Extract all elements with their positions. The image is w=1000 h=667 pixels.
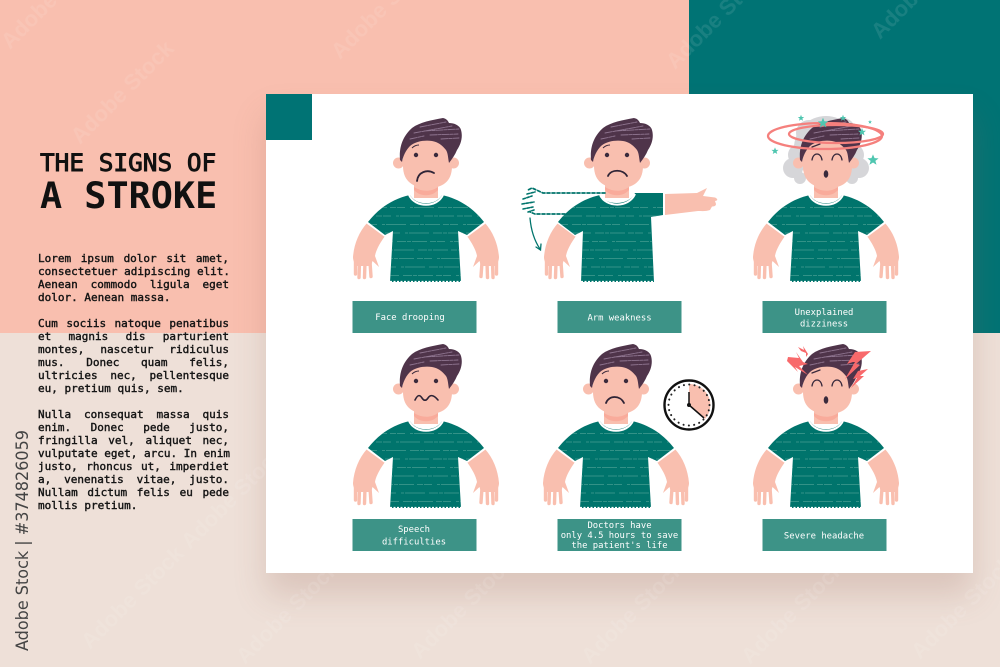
text block: paragraph 3: Nullam dictum felis eu pede (38, 486, 229, 499)
figure: arm weakness (521, 118, 718, 282)
text block: paragraph 2: ultricies nec, pellentesque (38, 369, 229, 382)
label: unexplained dizziness: dizziness (800, 320, 848, 330)
label: speech difficulties (352, 519, 476, 551)
text block: paragraph 2: mus. Donec quam felis, (38, 356, 229, 369)
dizzy rings (768, 123, 883, 149)
watermark pattern: Adobe Stock (176, 440, 289, 554)
label: arm weakness (558, 301, 682, 333)
watermark pattern: Adobe Stock (736, 555, 849, 667)
stock id vertical text: Adobe Stock | #374826059 (13, 430, 33, 651)
text block: paragraph 2: et magnis dis parturient (38, 330, 229, 343)
figure: severe headache (753, 344, 1000, 508)
text block: paragraph 2: Cum sociis natoque penatibus (38, 317, 229, 330)
left arm (544, 222, 576, 278)
white card (266, 94, 973, 573)
watermark pattern: Adobe Stock (231, 555, 344, 667)
title (40, 148, 217, 217)
text block: paragraph 3: mollis pretium. (38, 499, 137, 512)
label: arm weakness: Arm weakness (587, 314, 652, 324)
text block: paragraph 3: Nulla consequat massa quis (38, 408, 229, 421)
figure: speech difficulties (353, 344, 670, 508)
text block: paragraph 3 (38, 408, 230, 512)
watermark pattern: Adobe Stock (76, 540, 189, 654)
figure: doctors time limit (543, 344, 860, 508)
label: doctors time: only 4.5 hours to save (561, 531, 678, 541)
arrow: dashed ghost arm falling (522, 188, 605, 250)
watermark pattern: Adobe Stock (66, 35, 179, 149)
label: doctors time (558, 519, 682, 551)
text block: paragraph 3: justo, rhoncus ut, imperdiet (38, 460, 229, 473)
label: severe headache (762, 519, 886, 551)
label: face drooping (352, 301, 476, 333)
stars (771, 115, 879, 165)
text block: paragraph 3: fringilla vel, aliquet nec, (38, 434, 229, 447)
label: severe headache: Severe headache (784, 532, 864, 542)
title: A STROKE (40, 174, 217, 217)
icon: clock (664, 380, 714, 430)
card corner square (266, 94, 312, 140)
lightning bolts (787, 346, 871, 388)
background: pink block (0, 0, 689, 333)
label: doctors time: the patient's life (571, 541, 668, 551)
shirt with raised sleeve (558, 193, 663, 282)
label: unexplained dizziness (762, 301, 886, 333)
text block: paragraph 3: a, venenatis vitae, justo. (38, 473, 229, 486)
label: doctors time: Doctors have (587, 521, 652, 531)
text block: paragraph 1: consectetuer adipiscing elit. (38, 265, 230, 278)
text block: paragraph 3: enim. Donec pede justo, (38, 421, 229, 434)
figure: face drooping (353, 118, 670, 282)
watermark pattern: Adobe Stock (576, 555, 689, 667)
title: THE SIGNS OF (40, 148, 216, 177)
raised arm (665, 188, 717, 215)
text block: paragraph 1: dolor. Aenean massa. (38, 291, 170, 304)
background: teal block (689, 0, 1000, 333)
text block: paragraph 1 (38, 252, 230, 304)
grey cloud (783, 116, 869, 184)
text block: paragraph 3: vulputate eget, arcu. In enim (38, 447, 230, 460)
text block: paragraph 2 (38, 317, 229, 395)
text block: paragraph 2: montes, nascetur ridiculus (38, 343, 229, 356)
label: face drooping: Face drooping (375, 313, 445, 323)
label: speech difficulties: difficulties (382, 538, 446, 548)
text block: paragraph 1: Lorem ipsum dolor sit amet, (38, 252, 229, 265)
text block: paragraph 2: eu, pretium quis, sem. (38, 382, 184, 395)
watermark pattern: Adobe Stock (406, 550, 519, 664)
label: speech difficulties: Speech (398, 525, 430, 535)
text block: paragraph 1: Aenean commodo ligula eget (38, 278, 229, 291)
label: unexplained dizziness: Unexplained (795, 308, 853, 318)
figure: unexplained dizziness (753, 115, 1000, 282)
